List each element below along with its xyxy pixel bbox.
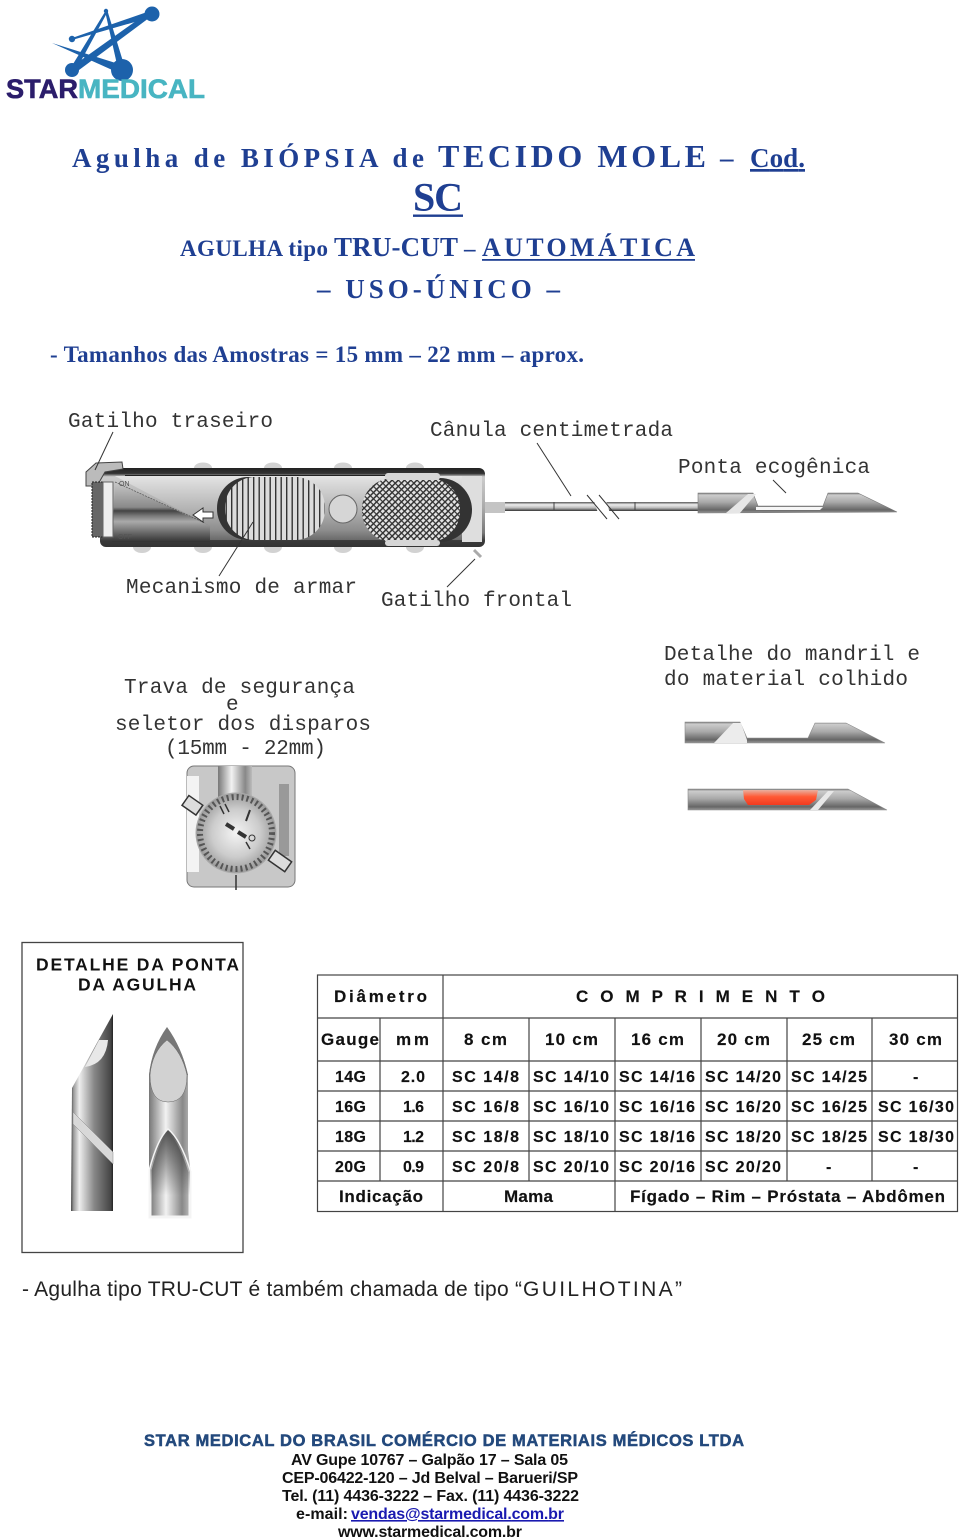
note: guillotine: GUILHOTINA” — [523, 1278, 682, 1301]
dial markers — [220, 804, 255, 849]
row: 18G: 1.2 — [403, 1129, 424, 1146]
address lines: CEP-06422-120 – Jd Belval – Barueri/SP — [282, 1470, 578, 1487]
safety dashed line — [115, 482, 205, 523]
diagram: biopsy device — [68, 411, 897, 613]
row: 20G: SC 20/10 — [533, 1159, 609, 1176]
title: AGULHA tipo — [180, 236, 328, 261]
caption: stylet detail: Detalhe do mandril e — [664, 644, 920, 667]
address lines: vendas@starmedical.com.br — [351, 1506, 564, 1523]
note: guillotine: - Agulha tipo TRU-CUT é também chamada de tipo “ — [22, 1278, 522, 1301]
row: 14G: SC 14/20 — [705, 1069, 781, 1086]
icon: arrow — [193, 508, 213, 522]
title: Agulha de BIÓPSIA de — [72, 143, 424, 173]
device labels: Ponta ecogênica — [678, 457, 870, 480]
row: 18G: 18G — [335, 1129, 366, 1146]
logo: Star Medical — [6, 6, 205, 104]
row: 20G: SC 20/20 — [705, 1159, 781, 1176]
caption: safety lock: seletor dos disparos — [115, 714, 371, 737]
device labels — [68, 411, 870, 613]
table header: 30 cm — [889, 1030, 942, 1049]
device labels: Mecanismo de armar — [126, 577, 357, 600]
leader lines — [95, 432, 786, 587]
table header: C O M P R I M E N T O — [576, 987, 825, 1006]
device labels: Gatilho frontal — [381, 590, 572, 613]
row: 16G: SC 16/16 — [619, 1099, 695, 1116]
row: 14G — [335, 1069, 918, 1086]
device body — [100, 468, 485, 547]
caption: stylet detail: do material colhido — [664, 669, 908, 692]
row: 18G: SC 18/20 — [705, 1129, 781, 1146]
panel heading — [36, 954, 239, 994]
company name: STAR MEDICAL DO BRASIL COMÉRCIO DE MATERIAIS MÉDICOS LTDA — [144, 1431, 744, 1450]
row: 20G: - — [913, 1159, 918, 1176]
table header: 20 cm — [717, 1030, 770, 1049]
logo wordmark — [6, 74, 205, 104]
on off marks: OFF — [118, 534, 132, 541]
table header: 8 cm — [464, 1030, 507, 1049]
cocking mechanism — [217, 477, 325, 540]
row: indication: Fígado – Rim – Próstata – Abdômen — [630, 1187, 945, 1206]
row: 16G: SC 16/8 — [452, 1099, 519, 1116]
row: 20G: SC 20/16 — [619, 1159, 695, 1176]
row: 14G: - — [913, 1069, 918, 1086]
title: AUTOMÁTICA — [482, 233, 695, 262]
title: TRU-CUT — [334, 232, 458, 262]
row: 14G: SC 14/10 — [533, 1069, 609, 1086]
caption: safety lock — [115, 677, 371, 761]
title — [72, 138, 805, 304]
diagram: empty stylet — [685, 722, 885, 743]
collected tissue — [743, 790, 818, 805]
title: – — [719, 143, 734, 173]
top black line — [125, 474, 385, 476]
echogenic tip — [698, 493, 897, 513]
pointer — [235, 875, 237, 890]
row: 14G: SC 14/8 — [452, 1069, 519, 1086]
footer: company contact — [144, 1431, 744, 1537]
right needle front view — [149, 1027, 191, 1217]
row: 16G: SC 16/30 — [878, 1099, 954, 1116]
row: 16G — [335, 1099, 954, 1116]
front trigger — [474, 550, 481, 557]
selector wheel — [92, 482, 113, 537]
title: Cod. — [750, 143, 805, 173]
row: 20G: 20G — [335, 1159, 366, 1176]
dial — [196, 793, 276, 873]
table header: mm — [396, 1030, 429, 1049]
row: 14G: SC 14/16 — [619, 1069, 695, 1086]
table header: Gauge — [321, 1030, 379, 1049]
rear dark panel — [112, 482, 210, 542]
on off marks: ON — [119, 481, 130, 488]
front light panel — [115, 476, 482, 540]
row: 16G: SC 16/25 — [791, 1099, 867, 1116]
lock housing — [187, 766, 295, 887]
row: 18G — [335, 1129, 954, 1146]
title: SC — [413, 174, 463, 220]
right end highlight — [462, 476, 482, 542]
front grip — [362, 473, 472, 546]
row: 18G: SC 18/25 — [791, 1129, 867, 1146]
address lines — [282, 1452, 579, 1537]
logo wordmark: STAR — [6, 74, 78, 104]
diagram: stylet with sample — [688, 789, 887, 810]
caption: safety lock: Trava de segurança — [124, 677, 355, 700]
caption: stylet detail — [664, 644, 920, 692]
row: 14G: 14G — [335, 1069, 366, 1086]
icon: star — [52, 6, 160, 81]
on off marks — [118, 481, 132, 541]
row: 18G: SC 18/30 — [878, 1129, 954, 1146]
title: – USO-ÚNICO – — [316, 274, 560, 304]
device bumps — [133, 462, 424, 553]
address lines: Tel. (11) 4436-3222 – Fax. (11) 4436-3222 — [282, 1488, 579, 1505]
device labels: Cânula centimetrada — [430, 420, 673, 443]
table header — [321, 987, 942, 1049]
row: 20G: SC 20/8 — [452, 1159, 519, 1176]
table header: 10 cm — [545, 1030, 598, 1049]
diagram: safety lock dial — [182, 766, 295, 890]
rear trigger — [86, 462, 123, 486]
row: 16G: SC 16/10 — [533, 1099, 609, 1116]
subtitle: sample sizes: - Tamanhos das Amostras = 15 mm – 22 mm – aprox. — [50, 342, 584, 367]
panel heading: DA AGULHA — [78, 974, 196, 994]
address lines: e-mail: — [296, 1506, 348, 1523]
row: 14G: 2.0 — [401, 1069, 425, 1086]
left needle side view — [71, 1014, 113, 1211]
row: 16G: SC 16/20 — [705, 1099, 781, 1116]
panel heading: DETALHE DA PONTA — [36, 954, 239, 974]
table header: Diâmetro — [334, 987, 427, 1006]
logo wordmark: MEDICAL — [78, 74, 205, 104]
row: indication: Mama — [504, 1187, 554, 1206]
address lines: AV Gupe 10767 – Galpão 17 – Sala 05 — [291, 1452, 568, 1469]
row: 20G: 0.9 — [403, 1159, 424, 1176]
caption: safety lock: (15mm - 22mm) — [165, 738, 326, 761]
left tab — [182, 795, 203, 815]
dial ticks — [200, 797, 272, 869]
center button — [329, 495, 357, 523]
row: 18G: SC 18/10 — [533, 1129, 609, 1146]
row: 20G — [335, 1159, 918, 1176]
row: 16G: 16G — [335, 1099, 366, 1116]
row: 16G: 1.6 — [403, 1099, 424, 1116]
panel: needle tip detail — [22, 942, 243, 1252]
row: indication: Indicação — [339, 1187, 423, 1206]
cannula — [485, 495, 698, 519]
title: TECIDO MOLE — [438, 138, 706, 174]
title: – — [463, 236, 476, 261]
row: 18G: SC 18/8 — [452, 1129, 519, 1146]
row: 20G: - — [826, 1159, 831, 1176]
caption: safety lock: e — [226, 694, 239, 717]
row: 18G: SC 18/16 — [619, 1129, 695, 1146]
table header: 16 cm — [631, 1030, 684, 1049]
table: needle sizes — [317, 975, 958, 1212]
row: indication — [339, 1187, 945, 1206]
table grid — [317, 975, 958, 1212]
row: 14G: SC 14/25 — [791, 1069, 867, 1086]
right tab — [268, 850, 292, 872]
housing neck — [218, 766, 252, 800]
housing side strips — [187, 776, 289, 872]
device labels: Gatilho traseiro — [68, 411, 273, 434]
table header: 25 cm — [802, 1030, 855, 1049]
